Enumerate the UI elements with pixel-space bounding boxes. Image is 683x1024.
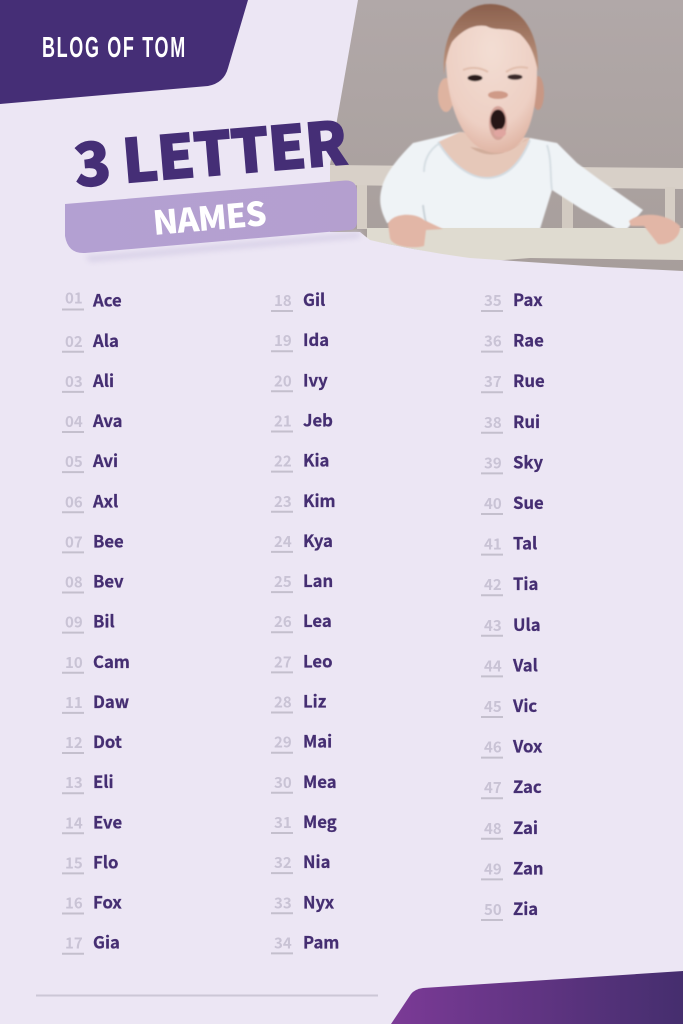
name 26: Lea bbox=[303, 608, 332, 632]
name 12 bbox=[62, 729, 122, 753]
name 33: Nyx bbox=[303, 889, 335, 913]
name 32: Nia bbox=[303, 849, 330, 873]
name 09: 09 bbox=[65, 612, 83, 633]
name 18 bbox=[271, 287, 325, 311]
name 04 bbox=[62, 408, 123, 432]
name 20: 20 bbox=[274, 370, 292, 391]
logo panel bbox=[0, 0, 248, 104]
name 19 bbox=[271, 327, 329, 351]
name 02: Ala bbox=[92, 328, 119, 352]
name 34: 34 bbox=[274, 932, 292, 953]
name 06 bbox=[62, 488, 118, 512]
names column 2 bbox=[271, 287, 339, 953]
name 47: 47 bbox=[484, 777, 502, 798]
name 38: 38 bbox=[484, 412, 502, 433]
name 49: 49 bbox=[484, 858, 502, 879]
name 15: Flo bbox=[93, 849, 118, 873]
name 22 bbox=[271, 448, 329, 472]
name 19: Ida bbox=[303, 327, 329, 351]
name 25: 25 bbox=[274, 571, 292, 592]
banner text: NAMES bbox=[151, 187, 268, 245]
name 21: Jeb bbox=[303, 408, 333, 432]
name 46: Vox bbox=[512, 734, 543, 758]
baby body bbox=[380, 132, 643, 229]
name 17 bbox=[62, 930, 120, 954]
name 42: Tia bbox=[513, 571, 538, 595]
name 16 bbox=[62, 890, 122, 914]
name 10 bbox=[62, 649, 130, 673]
name 32 bbox=[271, 849, 330, 873]
name 32: 32 bbox=[274, 852, 292, 873]
baby hands bbox=[388, 215, 680, 247]
name 43 bbox=[481, 612, 541, 636]
name 17: Gia bbox=[93, 930, 120, 954]
name 05 bbox=[62, 448, 118, 472]
name 07 bbox=[62, 528, 124, 552]
name 22: Kia bbox=[303, 448, 329, 472]
name 40: 40 bbox=[484, 493, 502, 514]
name 07: Bee bbox=[93, 528, 124, 552]
name 10: Cam bbox=[93, 649, 130, 673]
name 43: 43 bbox=[484, 615, 502, 636]
name 27: 27 bbox=[274, 651, 292, 672]
name 26 bbox=[271, 608, 332, 632]
name 13: 13 bbox=[65, 772, 83, 793]
name 35: 35 bbox=[484, 290, 502, 311]
name 36 bbox=[481, 328, 544, 352]
name 37: 37 bbox=[484, 371, 502, 392]
name 25: Lan bbox=[303, 568, 333, 592]
name 31: 31 bbox=[274, 812, 292, 833]
name 35: Pax bbox=[513, 287, 543, 311]
name 41 bbox=[481, 531, 537, 555]
name 33: 33 bbox=[274, 892, 292, 913]
name 23 bbox=[271, 488, 336, 512]
name 40 bbox=[481, 490, 544, 514]
name 22: 22 bbox=[274, 451, 292, 472]
curved bottom edge of photo bbox=[325, 232, 683, 280]
name 07: 07 bbox=[65, 531, 83, 552]
name 39: 39 bbox=[484, 452, 502, 473]
name 29: 29 bbox=[274, 732, 292, 753]
name 24: Kya bbox=[303, 528, 333, 552]
name 24 bbox=[271, 528, 333, 552]
name 44 bbox=[481, 652, 538, 676]
footer corner shape bbox=[391, 971, 683, 1024]
name 28: Liz bbox=[303, 688, 327, 712]
name 11 bbox=[62, 689, 129, 713]
name 33 bbox=[271, 889, 335, 913]
name 11: Daw bbox=[93, 689, 129, 713]
name 50: Zia bbox=[513, 896, 538, 920]
name 48: Zai bbox=[513, 815, 538, 839]
crib front rail bbox=[367, 228, 683, 262]
name 45 bbox=[481, 693, 537, 717]
name 03 bbox=[62, 368, 114, 392]
logo text: BLOG OF TOM bbox=[42, 32, 187, 64]
name 04: 04 bbox=[65, 411, 83, 432]
name 44: 44 bbox=[484, 655, 502, 676]
name 08 bbox=[62, 568, 124, 592]
name 11: 11 bbox=[65, 692, 83, 713]
name 19: 19 bbox=[274, 330, 292, 351]
name 47 bbox=[481, 774, 542, 798]
name 21 bbox=[271, 408, 333, 432]
name 12: 12 bbox=[65, 732, 83, 753]
name 46 bbox=[481, 734, 543, 758]
name 28 bbox=[271, 688, 327, 712]
name 23: Kim bbox=[303, 488, 336, 512]
photo: baby in crib bbox=[325, 0, 683, 272]
name 25 bbox=[271, 568, 333, 592]
name 06: 06 bbox=[65, 491, 83, 512]
names column 3 bbox=[481, 287, 545, 920]
name 24: 24 bbox=[274, 531, 292, 552]
name 45: 45 bbox=[484, 696, 502, 717]
name 05: 05 bbox=[65, 451, 83, 472]
name 16: Fox bbox=[93, 890, 122, 914]
name 41: Tal bbox=[513, 531, 537, 555]
name 42: 42 bbox=[484, 574, 502, 595]
name 09: Bil bbox=[93, 609, 115, 633]
name 16: 16 bbox=[65, 892, 83, 914]
name 09 bbox=[62, 609, 115, 633]
name 48: 48 bbox=[484, 818, 502, 839]
name 27 bbox=[271, 648, 333, 672]
title: 3 LETTER: 3 LETTER bbox=[70, 95, 351, 205]
name 45: Vic bbox=[512, 693, 537, 717]
name 31 bbox=[271, 809, 337, 833]
name 14: Eve bbox=[93, 809, 122, 833]
name 34 bbox=[271, 929, 339, 953]
name 30: Mea bbox=[303, 769, 337, 793]
name 27: Leo bbox=[303, 648, 333, 672]
name 48 bbox=[481, 815, 538, 839]
name 01: Ace bbox=[92, 288, 122, 312]
name 29: Mai bbox=[303, 729, 332, 753]
name 08: 08 bbox=[65, 572, 83, 592]
name 12: Dot bbox=[93, 729, 122, 753]
name 37: Rue bbox=[513, 368, 545, 392]
name 26: 26 bbox=[274, 611, 292, 632]
name 15 bbox=[62, 849, 118, 873]
name 38 bbox=[481, 409, 540, 433]
name 28: 28 bbox=[274, 692, 292, 712]
name 02 bbox=[62, 328, 119, 352]
baby head bbox=[438, 4, 544, 153]
banner shadow bbox=[85, 232, 360, 262]
name 40: Sue bbox=[513, 490, 544, 514]
name 35 bbox=[481, 287, 543, 311]
name 29 bbox=[271, 729, 332, 753]
name 50 bbox=[481, 896, 538, 920]
name 18: Gil bbox=[303, 287, 325, 311]
name 18: 18 bbox=[274, 290, 292, 311]
name 14 bbox=[62, 809, 122, 833]
name 03: Ali bbox=[92, 368, 114, 392]
name 05: Avi bbox=[92, 448, 118, 472]
name 30: 30 bbox=[274, 772, 292, 793]
name 47: Zac bbox=[513, 774, 542, 798]
name 04: Ava bbox=[92, 408, 123, 432]
name 20 bbox=[271, 367, 328, 391]
name 41: 41 bbox=[484, 534, 502, 555]
name 10: 10 bbox=[65, 652, 83, 673]
name 43: Ula bbox=[513, 612, 541, 636]
name 01: 01 bbox=[65, 288, 83, 308]
name 44: Val bbox=[512, 652, 538, 676]
name 30 bbox=[271, 769, 337, 793]
name 38: Rui bbox=[513, 409, 540, 433]
name 13: Eli bbox=[93, 769, 114, 793]
footer rule bbox=[36, 994, 378, 996]
name 46: 46 bbox=[484, 737, 502, 758]
name 01 bbox=[62, 288, 122, 312]
name 23: 23 bbox=[274, 491, 292, 512]
name 20: Ivy bbox=[303, 367, 328, 391]
crib back rail bbox=[328, 165, 683, 231]
name 36: Rae bbox=[513, 328, 544, 352]
name 36: 36 bbox=[484, 331, 502, 352]
name 31: Meg bbox=[303, 809, 337, 833]
name 21: 21 bbox=[274, 410, 292, 432]
name 15: 15 bbox=[65, 852, 83, 873]
name 42 bbox=[481, 571, 538, 595]
name 13 bbox=[62, 769, 114, 793]
name 34: Pam bbox=[303, 929, 339, 953]
name 39: Sky bbox=[513, 449, 543, 473]
banner: NAMES bbox=[65, 180, 357, 253]
name 50: 50 bbox=[484, 899, 502, 920]
names column 1 bbox=[62, 288, 130, 954]
name 14: 14 bbox=[65, 812, 83, 833]
name 49 bbox=[481, 855, 544, 879]
name 17: 17 bbox=[65, 933, 83, 954]
name 39 bbox=[481, 449, 543, 473]
name 49: Zan bbox=[513, 855, 544, 879]
name 08: Bev bbox=[93, 568, 124, 592]
name 37 bbox=[481, 368, 545, 392]
name 03: 03 bbox=[65, 371, 83, 392]
name 02: 02 bbox=[65, 331, 83, 352]
name 06: Axl bbox=[92, 488, 118, 512]
